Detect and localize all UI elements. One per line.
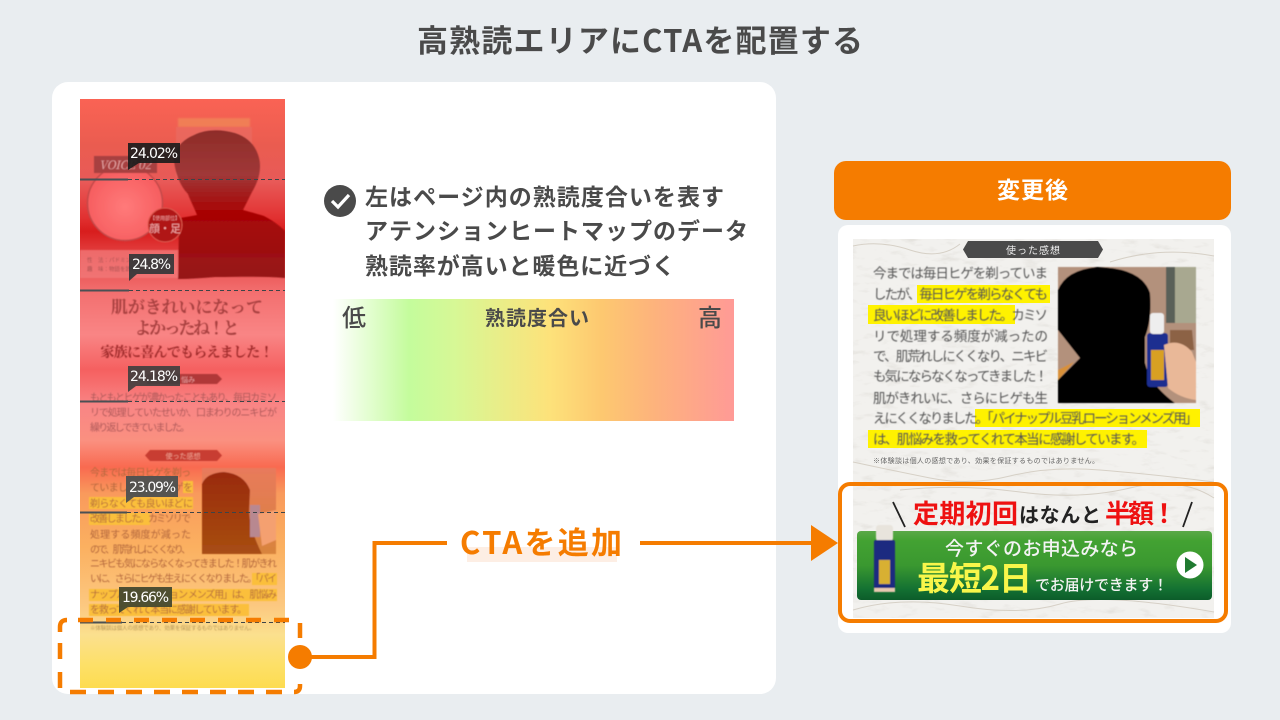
- CTA highlight outline: [840, 484, 1226, 621]
- heatmap image: ので、肌荒れしにくくなり、: [90, 541, 191, 556]
- explanation text: 熟読率が高いと暖色に近づく: [365, 247, 675, 281]
- connector from highlighted area to label: [288, 543, 447, 669]
- heatmap image: 家族に喜んでもらえました！: [100, 342, 274, 362]
- header: after change: [834, 161, 1231, 220]
- CTA button: 最短2日: [917, 552, 1032, 600]
- page screenshot: [853, 239, 1214, 618]
- heatmap image: 顔・足: [149, 221, 181, 236]
- heatmap image: ナップル豆乳ローション メンズ用」は、肌悩み: [90, 586, 277, 601]
- reach label 24.18%: 24.18%: [130, 369, 178, 385]
- icon: play button: [1176, 552, 1204, 578]
- heatmap image: VOICE 02: [99, 157, 153, 173]
- explanation text: アテンションヒートマップのデータ: [365, 212, 748, 246]
- testimonial text: 今までは毎日ヒゲを剃っていま: [873, 262, 1048, 282]
- arrow to result: [640, 525, 838, 561]
- reach label 19.66%: 19.66%: [122, 590, 169, 606]
- reach label 24.8%: [129, 254, 174, 281]
- panel: heatmap explanation: [52, 82, 776, 694]
- heatmap image: 趣 味：物語を読む: [87, 265, 137, 273]
- testimonial text: も気にならなくなってきました！: [873, 365, 1048, 385]
- heatmap image: 剃らなくても良いほどに: [90, 495, 193, 510]
- legend: read depth gradient: 熟読度合い: [485, 302, 589, 331]
- heatmap image: よかったね！と: [134, 314, 240, 339]
- heatmap image: 改善しました。カミソリで: [90, 510, 191, 525]
- testimonial text: は、肌悩みを救ってくれて本当に感謝しています。: [873, 428, 1145, 448]
- heatmap image: ※体験談は個人の感想であり、効果を保証するものではありません。: [90, 624, 255, 632]
- reach label 23.09%: [126, 476, 178, 503]
- reach label 23.09%: 23.09%: [129, 480, 176, 496]
- testimonial text: 肌がきれいに、さらにヒゲも生: [873, 387, 1048, 407]
- heatmap image: を救ってくれて本当に感謝しています。: [90, 601, 247, 616]
- scroll line markers: [80, 180, 285, 622]
- CTA button: 今すぐのお申込みなら: [945, 534, 1138, 561]
- icon: check mark: [324, 185, 356, 217]
- testimonial text: 良いほどに改善しました。カミソ: [873, 304, 1048, 324]
- heatmap image: 繰り返しできていました。: [90, 419, 190, 434]
- heatmap image: 【使用部位】: [150, 215, 180, 222]
- legend: read depth gradient: [333, 298, 734, 421]
- testimonial text: したが、毎日ヒゲを剃らなくても: [873, 283, 1048, 303]
- heatmap image: 使った感想: [166, 452, 200, 462]
- CTA button: [857, 531, 1212, 600]
- callout: add CTA: CTAを追加: [460, 518, 622, 563]
- CTA headline: 半額！: [1105, 494, 1177, 531]
- heatmap image: いに、さらにヒゲも生えにくくなりました。「パイ: [90, 570, 277, 585]
- testimonial text: ※体験談は個人の感想であり、効果を保証するものではありません。: [873, 456, 1099, 466]
- reach label 24.8%: 24.8%: [132, 257, 171, 273]
- CTA headline: [893, 494, 1192, 531]
- dashed highlight around low-read area: [60, 620, 300, 692]
- section tag: 使った感想: [1006, 242, 1060, 257]
- heatmap image: 肌がきれいになって: [111, 293, 263, 318]
- heatmap image: 今までは毎日ヒゲを剃っ: [90, 464, 191, 479]
- testimonial text: で、肌荒れしにくくなり、ニキビ: [873, 345, 1048, 365]
- heatmap image: もともとヒゲが濃かったこともあり、毎日カミソ: [90, 389, 277, 404]
- panel: page after change: [838, 225, 1231, 633]
- header: after change: 変更後: [997, 171, 1068, 205]
- CTA button: でお届けできます！: [1035, 574, 1168, 595]
- heatmap image: 性 法：パドミント: [87, 256, 137, 264]
- section tag: [963, 241, 1103, 258]
- CTA headline: はなんと: [1019, 499, 1101, 528]
- reach label 24.02%: 24.02%: [130, 146, 178, 162]
- CTA banner: [857, 494, 1212, 600]
- reach label 24.02%: [128, 143, 180, 170]
- title: 高熟読エリアにCTAを配置する: [417, 16, 863, 61]
- testimonial text: [868, 262, 1200, 466]
- product bottle: [874, 525, 895, 592]
- heatmap image: ニキビも気にならなくなってきました！肌がきれ: [90, 555, 277, 570]
- explanation text: 左はページ内の熟読度合いを表す: [365, 178, 724, 212]
- reach label 24.18%: [128, 366, 180, 392]
- testimonial photo: [1058, 267, 1196, 403]
- heatmap image: ていました。毎日ヒゲを: [90, 479, 193, 494]
- heatmap image: 処理する頻度が減った: [90, 526, 191, 541]
- reach label 19.66%: [119, 587, 172, 613]
- legend: read depth gradient: 高: [698, 298, 722, 333]
- testimonial text: リで処理する頻度が減ったの: [873, 325, 1048, 345]
- heatmap image: [80, 99, 285, 688]
- explanation text: [365, 178, 748, 281]
- heatmap image: 悩み: [181, 375, 195, 385]
- legend: read depth gradient: 低: [342, 298, 366, 333]
- CTA headline: 定期初回: [913, 494, 1018, 531]
- heatmap image: リで処理していたせいか、口まわりのニキビが: [90, 404, 277, 419]
- testimonial text: えにくくなりました。「パイナップル豆乳ローションメンズ用」: [873, 407, 1198, 427]
